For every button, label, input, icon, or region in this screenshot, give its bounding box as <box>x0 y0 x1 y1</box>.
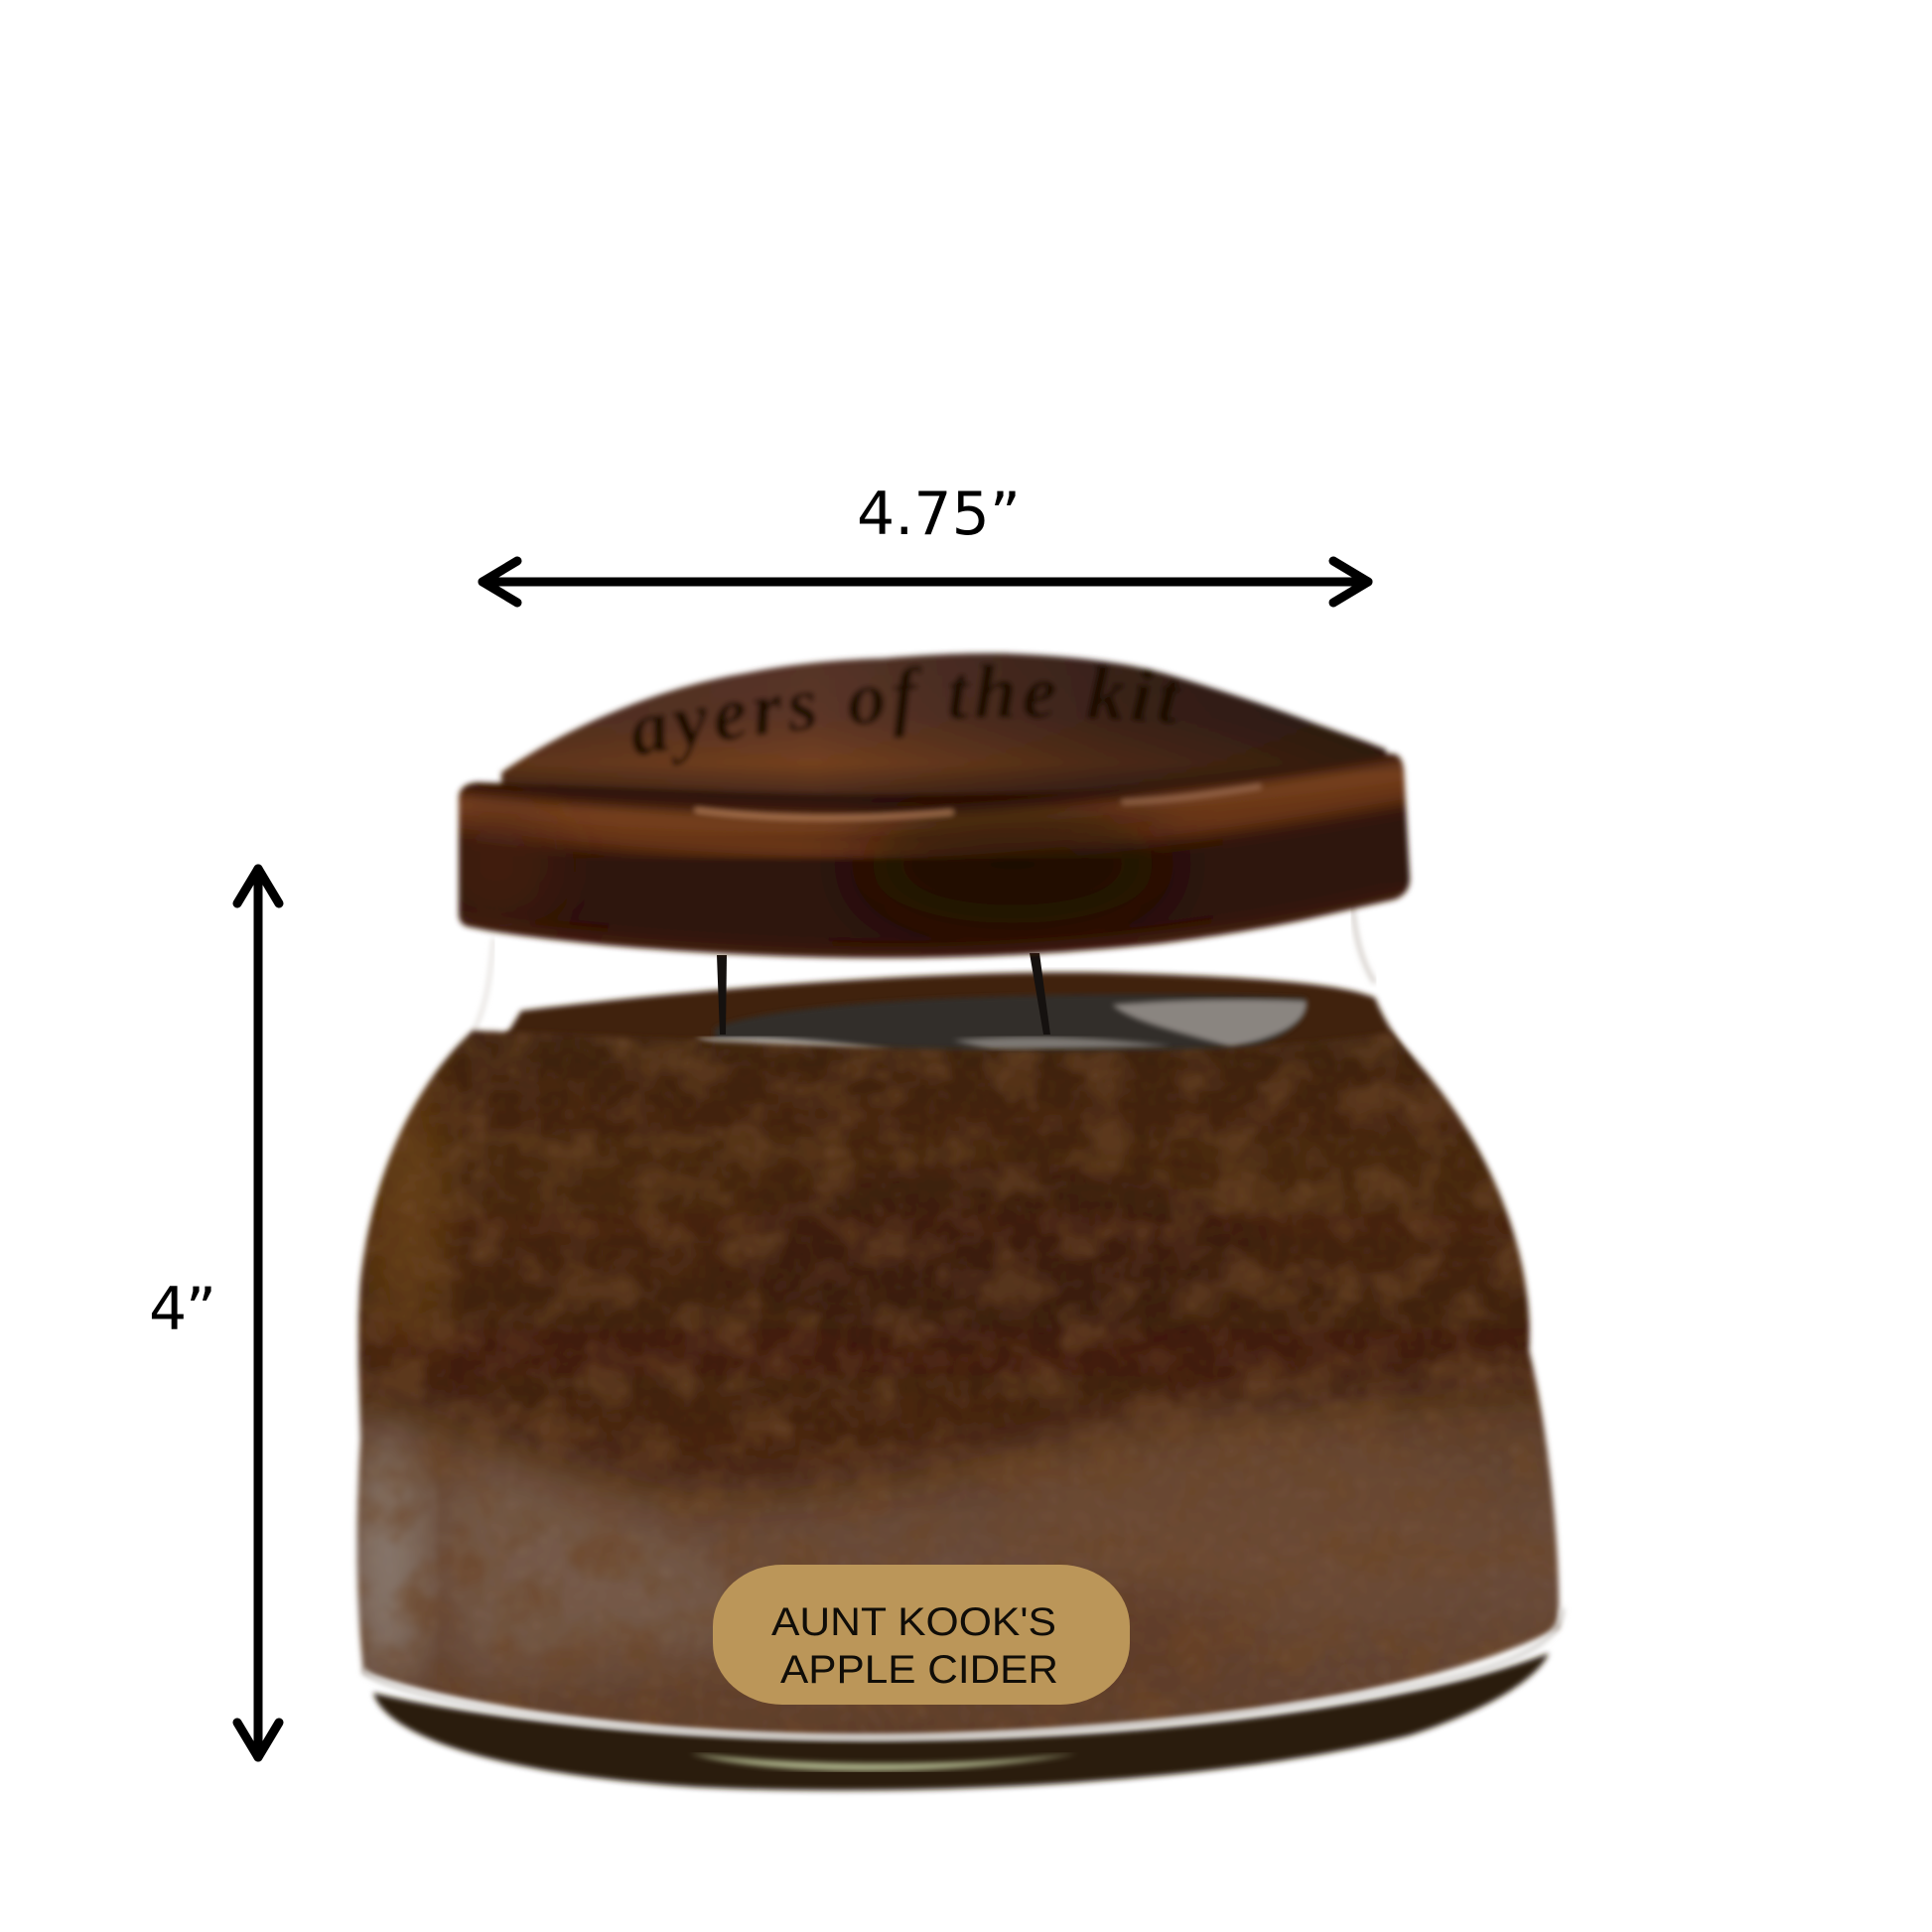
wick right <box>1030 953 1050 1035</box>
wick left <box>717 955 727 1035</box>
label text: AUNT KOOK'S <box>771 1600 1056 1644</box>
height label: 4” <box>149 1275 216 1344</box>
label <box>713 1565 1130 1705</box>
glass neck <box>471 898 1375 1037</box>
embossed lid text: ayers of the kit <box>629 662 1180 767</box>
width arrow <box>483 561 1368 603</box>
wax melt pool <box>486 972 1415 1067</box>
wax body <box>338 1013 1588 1757</box>
candle jar <box>351 648 1567 1795</box>
glass base <box>363 1608 1563 1790</box>
lid rim <box>437 754 1420 960</box>
lid dome <box>496 648 1391 799</box>
width label: 4.75” <box>857 480 1021 549</box>
lid <box>454 648 1415 963</box>
label text: APPLE CIDER <box>780 1648 1058 1692</box>
height arrow <box>237 869 279 1757</box>
